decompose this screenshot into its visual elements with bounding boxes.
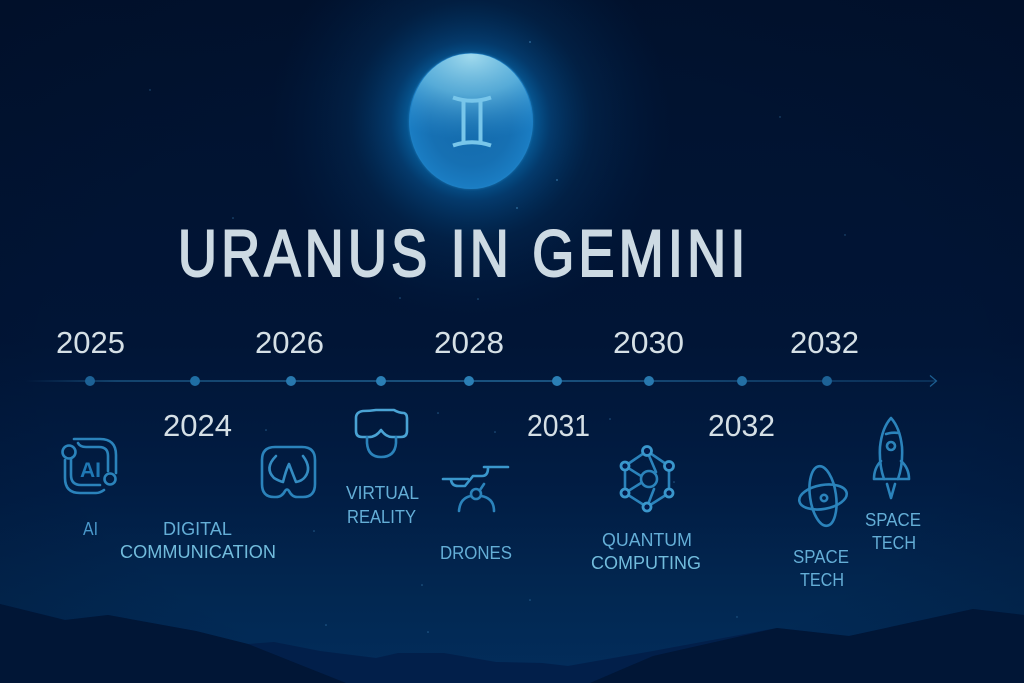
icon: virtual reality goggles [356, 410, 407, 457]
label: quantum computing: COMPUTING [591, 552, 701, 573]
timeline axis with arrow [25, 376, 936, 386]
years below the axis: 2024 [163, 408, 232, 443]
label: quantum computing: QUANTUM [602, 529, 692, 550]
label: space tech upper [865, 509, 921, 553]
label: space tech upper: TECH [872, 532, 916, 553]
mountains: back ridge [0, 604, 1024, 683]
icon: quantum computing network [621, 446, 674, 511]
label: space tech lower: SPACE [793, 546, 849, 567]
icon: Gemini symbol [453, 98, 491, 146]
label: space tech upper: SPACE [865, 509, 921, 530]
icon: atom orbit [797, 464, 849, 528]
label: space tech lower [793, 546, 849, 590]
years above the axis: 2030 [613, 325, 684, 360]
label: virtual reality: REALITY [347, 506, 416, 527]
icon: headset visor [262, 447, 315, 497]
icon: AI chip [62, 439, 116, 493]
label: drones: DRONES [440, 542, 512, 563]
years above the axis: 2028 [434, 325, 504, 360]
years above the axis: 2032 [790, 325, 859, 360]
label: quantum computing [591, 529, 701, 573]
label: virtual reality [346, 482, 419, 527]
stars [149, 41, 846, 633]
title: URANUS IN GEMINI [178, 216, 745, 290]
icon: rocket [874, 418, 909, 498]
label: digital communication: COMMUNICATION [120, 541, 276, 562]
mountains: front ridge [0, 604, 1024, 683]
years above the axis: 2025 [56, 325, 125, 360]
label: virtual reality: VIRTUAL [346, 482, 419, 503]
label: digital communication: DIGITAL [163, 518, 232, 539]
planet with Gemini glyph [409, 53, 533, 189]
icon: AI chip: AI [80, 459, 101, 482]
years above the axis: 2026 [255, 325, 324, 360]
years above the axis [56, 325, 859, 360]
label: space tech lower: TECH [800, 569, 844, 590]
years below the axis: 2032 [708, 408, 775, 443]
icon: drone [443, 467, 508, 511]
years below the axis: 2031 [527, 408, 590, 443]
label: digital communication [120, 518, 276, 562]
years below the axis [163, 408, 775, 443]
label: AI: AI [83, 518, 98, 539]
